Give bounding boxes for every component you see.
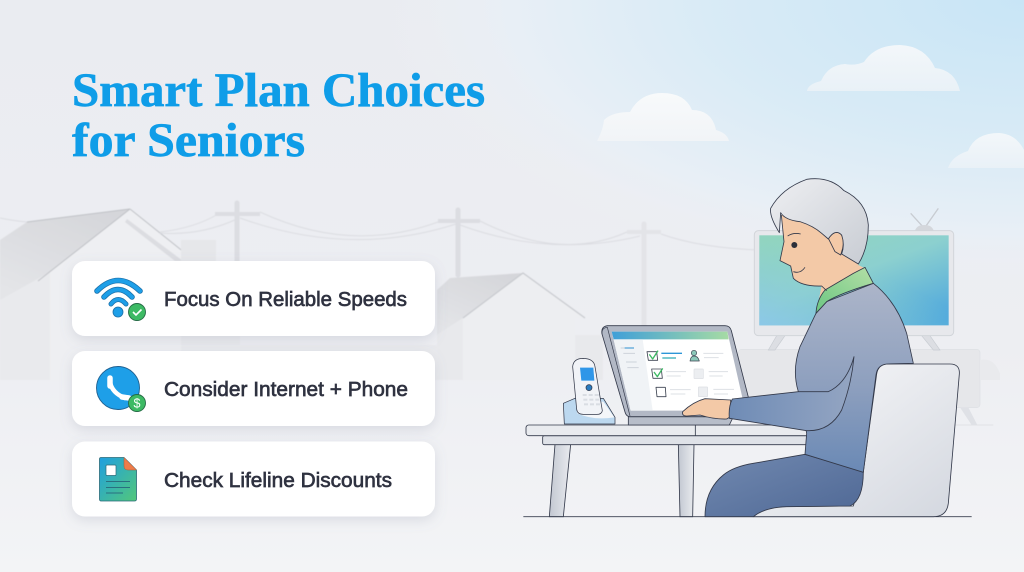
clouds [597, 45, 1024, 168]
distant band [181, 262, 437, 380]
floor line behind tv [953, 424, 993, 426]
neck [817, 265, 865, 312]
eye and smile [788, 233, 805, 272]
person [682, 179, 913, 517]
label: Consider Internet + Phone [164, 378, 408, 401]
card: Check Lifeline Discounts [72, 442, 435, 516]
desk [526, 425, 809, 517]
title: for Seniors [72, 114, 305, 167]
label: Focus On Reliable Speeds [164, 288, 407, 311]
icon: phone with dollar [96, 366, 146, 412]
tv [754, 208, 954, 350]
pants [705, 454, 863, 517]
icon: wifi with check [97, 280, 146, 320]
torso [795, 283, 913, 472]
floor line [523, 515, 972, 518]
collar [816, 267, 873, 313]
label: Check Lifeline Discounts [164, 469, 392, 492]
checklist [647, 350, 734, 397]
laptop screen [612, 332, 745, 411]
utility poles and wires [0, 203, 760, 330]
icon: phone with dollar: $ [134, 396, 141, 410]
cordless phone [563, 358, 615, 424]
middle house [437, 273, 603, 380]
tv stand and console [738, 349, 1000, 425]
hair [771, 179, 868, 264]
face [780, 215, 858, 286]
left house [0, 209, 216, 380]
card: Focus On Reliable Speeds [72, 261, 435, 336]
laptop [602, 326, 753, 425]
background neighbourhood [0, 203, 760, 380]
icon: document [100, 458, 136, 501]
ear [828, 232, 843, 255]
card: Consider Internet + Phone [72, 351, 435, 426]
title: Smart Plan Choices [72, 64, 485, 117]
title [72, 64, 485, 167]
hand [682, 399, 731, 419]
face outline [780, 215, 827, 291]
chair [753, 364, 959, 517]
illustration: senior at laptop [523, 179, 1000, 517]
sleeve [729, 357, 854, 431]
